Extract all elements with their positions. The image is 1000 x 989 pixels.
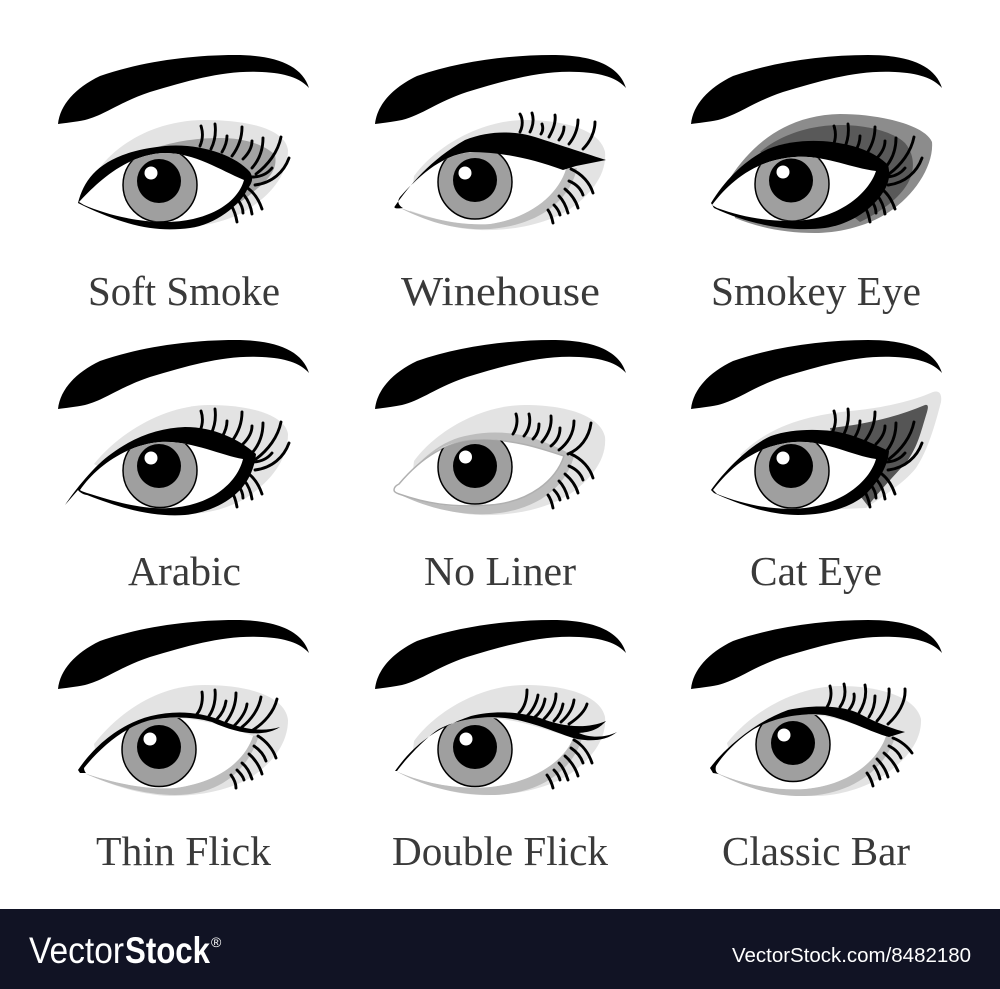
panel: Double Flick	[375, 620, 626, 874]
eyebrow	[375, 340, 626, 409]
eye: double flick	[395, 685, 617, 795]
eyebrow	[375, 620, 626, 689]
label: Winehouse	[401, 268, 600, 314]
logo wordmark: ®	[211, 934, 222, 950]
panel: Soft Smoke	[58, 55, 309, 314]
eyebrow	[58, 340, 309, 409]
eyebrow	[58, 55, 309, 124]
panel: Winehouse	[375, 55, 626, 314]
eyebrow	[58, 620, 309, 689]
logo wordmark	[29, 930, 222, 971]
panel: Smokey Eye	[691, 55, 942, 314]
label: Thin Flick	[96, 828, 272, 874]
label: Double Flick	[392, 828, 608, 874]
eye: classic bar	[710, 684, 921, 796]
label: Smokey Eye	[711, 268, 921, 314]
eye: cat eye wing shadow	[711, 392, 941, 515]
eyebrow	[691, 55, 942, 124]
eye: winehouse wing liner	[394, 113, 606, 230]
eye: arabic heavy liner	[65, 405, 289, 515]
label: Soft Smoke	[88, 268, 280, 314]
eyebrow	[691, 340, 942, 409]
eye: soft smoke shadow and liner	[78, 120, 289, 229]
eyebrow	[691, 620, 942, 689]
eye: thin flick	[78, 685, 288, 796]
label: Cat Eye	[750, 548, 882, 594]
panel: No Liner	[375, 340, 626, 594]
label: Arabic	[128, 548, 241, 594]
eye: no liner	[394, 405, 605, 515]
label: Classic Bar	[722, 828, 910, 874]
panel: Cat Eye	[691, 340, 942, 594]
panel: Thin Flick	[58, 620, 309, 874]
logo wordmark: Stock	[125, 930, 210, 971]
eyebrow	[375, 55, 626, 124]
eye: smokey dark shadow	[711, 114, 932, 233]
panel: Arabic	[58, 340, 309, 594]
logo wordmark: Vector	[29, 930, 124, 971]
label: No Liner	[424, 548, 576, 594]
image id: VectorStock.com/8482180	[732, 945, 971, 967]
panel: Classic Bar	[691, 620, 942, 874]
footer bar	[0, 909, 1000, 989]
